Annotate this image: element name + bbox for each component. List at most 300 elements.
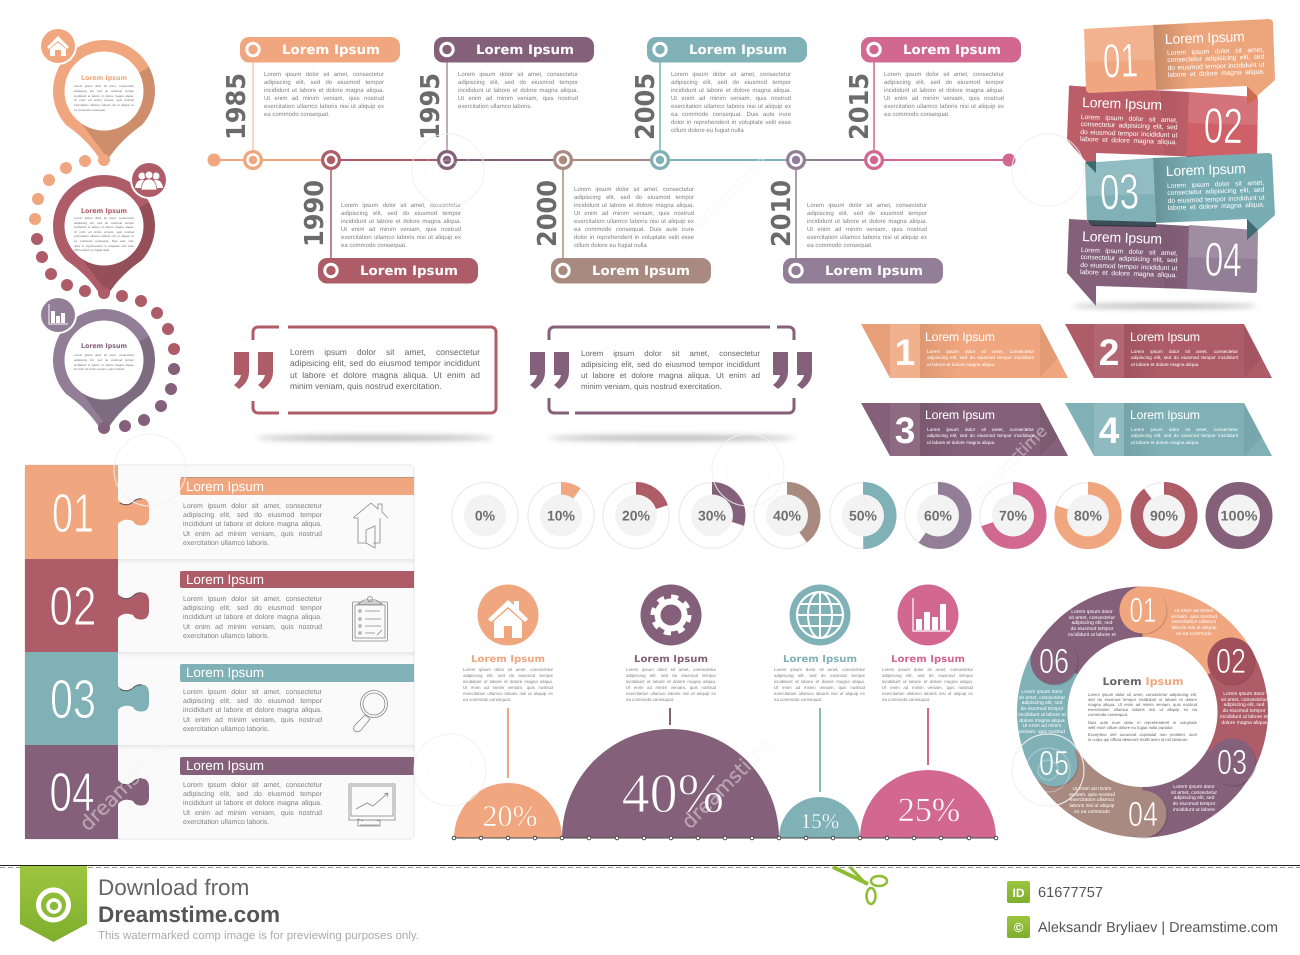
event 2010: incididunt ut labore et dolore magna aliqua. bbox=[807, 219, 927, 225]
event 2000: incididunt ut labore et dolore magna aliqua. bbox=[574, 203, 694, 209]
column 20%: Ut enim ad minim veniam, quis nostrud bbox=[463, 685, 553, 690]
banner 01: 01 bbox=[1102, 34, 1139, 89]
panel: location pins bbox=[29, 27, 180, 434]
chart: circular cycle bbox=[1017, 586, 1268, 838]
row 04: incididunt ut labore et dolore magna aliqua. bbox=[183, 800, 322, 807]
ribbon 4: 4 bbox=[1099, 410, 1120, 451]
banner 02: consectetur adipisicing elit, sed bbox=[1081, 121, 1178, 132]
icon: scissors bbox=[833, 867, 887, 904]
event 2015: incididunt ut labore et dolore magna aliqua. bbox=[884, 88, 1004, 94]
pin 1 orange bbox=[53, 40, 155, 159]
row 01 bbox=[25, 465, 414, 559]
pin 3 purple: Lorem Ipsum bbox=[81, 342, 127, 350]
banner 04: Lorem Ipsum bbox=[1082, 228, 1162, 247]
timeline nodes bbox=[208, 150, 1016, 170]
pin 1 orange: exercitation ullamco laboris nisi ut aliquip ex bbox=[74, 103, 134, 107]
row 02: Lorem Ipsum bbox=[186, 572, 264, 587]
center text: exercitation ullamco laboris nisi ut aliquip ex ea bbox=[1088, 707, 1197, 712]
column 20%: Lorem ipsum dolor sit amet, consectetur bbox=[463, 667, 553, 672]
banner 04: 04 bbox=[1204, 234, 1242, 287]
segment text 01: ex ea commodo bbox=[1176, 631, 1212, 637]
segment text 06: incididunt ut labore et bbox=[1068, 632, 1116, 638]
ribbon 3: Lorem ipsum dolor sit amet, consectetur bbox=[927, 427, 1034, 432]
column 15%: adipiscing elit, sed do eiusmod tempor bbox=[774, 673, 865, 678]
event 1985: Lorem ipsum dolor sit amet, consectetur bbox=[264, 72, 384, 78]
donut 40%: 40% bbox=[773, 508, 802, 524]
pin 2 rose: exercitation ullamco laboris nisi ut aliquip ex bbox=[74, 234, 134, 238]
icon: quote marks bbox=[234, 352, 273, 389]
pin 2 rose: adipiscing elit, sed do eiusmod tempor bbox=[74, 221, 134, 225]
segment text 06: sit amet, consectetur bbox=[1069, 615, 1115, 621]
event 2005: incididunt ut labore et dolore magna aliqua. bbox=[671, 88, 791, 94]
event 2005: adipiscing elit, sed do eiusmod tempor bbox=[671, 80, 791, 86]
banner 02 bbox=[1067, 86, 1258, 173]
center text: in culpa qui officia deserunt mollit anim id est laborum. bbox=[1088, 737, 1188, 742]
donut 0% bbox=[452, 482, 518, 548]
panel: folded banners bbox=[1067, 19, 1275, 308]
banner 04: labore et dolore magna aliqua. bbox=[1080, 269, 1177, 279]
event 2000: Lorem Ipsum bbox=[592, 264, 690, 279]
panel: quote box 2 bbox=[530, 327, 812, 440]
event 1985: adipiscing elit, sed do eiusmod tempor bbox=[264, 80, 384, 86]
segment text 03 bbox=[1170, 785, 1218, 817]
watermark spirals bbox=[114, 134, 1084, 806]
event 2015: Lorem ipsum dolor sit amet, consectetur bbox=[884, 72, 1004, 78]
row 02: incididunt ut labore et dolore magna aliqua. bbox=[183, 614, 322, 621]
segment text 05: sit amet, consectetur bbox=[1019, 695, 1065, 701]
column 15%: incididunt ut labore et dolore magna aliqua. bbox=[774, 679, 865, 684]
watermark text: dreamstime bbox=[677, 732, 778, 834]
icon: people badge bbox=[130, 161, 168, 199]
donut 100%: 100% bbox=[1220, 508, 1258, 524]
event 2015: 2015 bbox=[845, 73, 875, 140]
ribbon 2: 2 bbox=[1099, 332, 1119, 373]
event 2005: dolor in reprehenderit in voluptate velit esse bbox=[671, 120, 791, 126]
column 40% bbox=[562, 584, 779, 838]
segment text 05: adipiscing elit, sed bbox=[1022, 700, 1062, 706]
quote text: Lorem ipsum dolor sit amet, consectetur bbox=[581, 349, 760, 358]
event 2005: 2005 bbox=[631, 73, 661, 140]
row 01: adipiscing elit, sed do eiusmod tempor bbox=[183, 512, 322, 519]
row 01: 01 bbox=[52, 482, 94, 544]
banner 01: labore et dolore magna aliqua. bbox=[1168, 68, 1265, 79]
ribbon 1: 1 bbox=[895, 332, 915, 373]
event 2005: Ut enim ad minim veniam, quis nostrud bbox=[671, 96, 791, 102]
banner 01 bbox=[1084, 19, 1275, 105]
banner 02: do eiusmod tempor incididunt ut bbox=[1080, 129, 1177, 139]
column 20%: ea commodo consequat. bbox=[463, 697, 511, 702]
pin 2 rose: incididunt ut labore et dolore magna aliqua. bbox=[74, 225, 134, 229]
panel: quote box 1 bbox=[234, 327, 496, 440]
event 1990: Lorem Ipsum bbox=[360, 264, 458, 279]
banner 03: labore et dolore magna aliqua. bbox=[1168, 201, 1265, 212]
segment text 05: veniam, quis nostrud bbox=[1019, 729, 1065, 735]
ribbon 2: Lorem Ipsum bbox=[1130, 330, 1200, 344]
event 2000: adipiscing elit, sed do eiusmod tempor bbox=[574, 195, 694, 201]
row 01: Lorem ipsum dolor sit amet, consectetur bbox=[183, 503, 322, 510]
center text: sed do eiusmod tempor incididunt ut labore et dolore bbox=[1088, 697, 1197, 702]
author credit bbox=[1007, 916, 1278, 938]
segment text 04: ex ea commodo bbox=[1074, 809, 1110, 815]
ribbon 2: adipiscing elit, sed do eiusmod tempor incididunt bbox=[1131, 355, 1238, 360]
node 01 bbox=[1120, 586, 1168, 634]
column 15%: Lorem ipsum dolor sit amet, consectetur bbox=[774, 667, 865, 672]
banner 03: do eiusmod tempor incididunt ut bbox=[1168, 194, 1265, 205]
ribbon 3 bbox=[861, 403, 1068, 456]
row 03: 03 bbox=[50, 668, 96, 730]
column 40%: Lorem Ipsum bbox=[634, 654, 708, 665]
event 1995: adipiscing elit, sed do eiusmod tempor bbox=[458, 80, 578, 86]
row 04 bbox=[25, 745, 414, 839]
event 2005: exercitation ullamco laboris nisi ut aliquip ex bbox=[671, 104, 791, 110]
icon: house bbox=[488, 600, 528, 638]
ribbon 1: ut labore et dolore magna aliqua. bbox=[927, 362, 996, 367]
icon: gear bbox=[653, 597, 689, 633]
pin 2 rose: cillum dolore eu fugiat nulla bbox=[74, 248, 109, 252]
row 03: Ut enim ad minim veniam, quis nostrud bbox=[183, 717, 322, 724]
segment 01 bbox=[1142, 586, 1251, 674]
ribbon 4: adipiscing elit, sed do eiusmod tempor incididunt bbox=[1131, 433, 1238, 438]
node 06: 06 bbox=[1039, 642, 1069, 681]
column 25%: Ut enim ad minim veniam, quis nostrud bbox=[882, 685, 973, 690]
ribbon 4: ut labore et dolore magna aliqua. bbox=[1131, 440, 1200, 445]
icon: magnifier outline bbox=[354, 690, 388, 732]
column 20% bbox=[454, 584, 562, 838]
event 2005: ea commodo consequat. Duis aute irure bbox=[671, 112, 791, 118]
event 2010 bbox=[767, 180, 943, 284]
pin 3 purple: Lorem ipsum dolor sit amet, consectetur bbox=[74, 353, 134, 357]
donut 70% bbox=[980, 482, 1046, 548]
event 2000: Ut enim ad minim veniam, quis nostrud bbox=[574, 211, 694, 217]
column 20%: 20% bbox=[482, 800, 538, 833]
donut 20% bbox=[603, 482, 669, 548]
ribbon 1: Lorem Ipsum bbox=[925, 330, 995, 344]
pin 3 purple bbox=[53, 309, 155, 428]
event 1995: Lorem ipsum dolor sit amet, consectetur bbox=[458, 72, 578, 78]
author credit: © bbox=[1014, 920, 1024, 935]
panel: puzzle list bbox=[25, 465, 414, 839]
event 2010: ea commodo consequat. bbox=[807, 243, 873, 249]
quote text: minim veniam, quis nostrud exercitation. bbox=[581, 382, 722, 391]
event 1995: exercitation ullamco laboris. bbox=[458, 104, 532, 110]
ribbon 2 bbox=[1065, 324, 1272, 378]
event 2010: Lorem Ipsum bbox=[825, 264, 923, 279]
icon: house badge bbox=[39, 27, 77, 65]
row 04: adipiscing elit, sed do eiusmod tempor bbox=[183, 791, 322, 798]
banner 02: 02 bbox=[1203, 98, 1243, 154]
segment text 01: veniam, quis nostrud bbox=[1171, 614, 1217, 620]
banner 02: Lorem ipsum dolor sit amet, bbox=[1081, 114, 1178, 124]
donut 80% bbox=[1055, 482, 1121, 548]
donut 90% bbox=[1131, 482, 1197, 548]
dreamstime ribbon bbox=[20, 866, 87, 942]
download text bbox=[98, 875, 419, 942]
segment 02 bbox=[1208, 649, 1268, 775]
donut 50% bbox=[830, 482, 896, 548]
download text: Dreamstime.com bbox=[98, 902, 280, 927]
segment text 05 bbox=[1018, 690, 1066, 736]
event 1990: Ut enim ad minim veniam, quis nostrud bbox=[341, 227, 461, 233]
quote text bbox=[581, 348, 760, 396]
center title: Lorem Ipsum bbox=[1102, 676, 1184, 688]
segment text 04: veniam, quis nostrud bbox=[1069, 792, 1115, 798]
node 05 bbox=[1030, 740, 1078, 788]
image id: ID bbox=[1012, 886, 1025, 900]
center text: magna aliqua. Ut enim ad minim veniam, quis nostrud bbox=[1088, 702, 1197, 707]
column 40%: Ut enim ad minim veniam, quis nostrud bbox=[626, 685, 716, 690]
banner 04: do eiusmod tempor incididunt ut bbox=[1080, 262, 1177, 272]
quote text: adipisicing elit, sed do eiusmod tempor incididunt bbox=[290, 358, 480, 368]
row 01: Lorem Ipsum bbox=[186, 479, 264, 494]
event 2000: ea commodo consequat. Duis aute irure bbox=[574, 227, 694, 233]
banner 01: consectetur adipisicing elit, sed bbox=[1167, 54, 1264, 64]
row 01: Ut enim ad minim veniam, quis nostrud bbox=[183, 531, 322, 538]
segment text 03: sit amet, consectetur bbox=[1171, 790, 1217, 796]
image id: 61677757 bbox=[1038, 885, 1103, 901]
quote text: ut labore et dolore magna aliqua. Ut enim ad bbox=[290, 370, 480, 380]
column 20%: exercitation ullamco laboris nisi ut aliquip ex bbox=[463, 691, 553, 696]
event 1990: adipiscing elit, sed do eiusmod tempor bbox=[341, 211, 461, 217]
watermark text: dreamstime bbox=[969, 421, 1051, 503]
column 25%: 25% bbox=[898, 792, 960, 829]
segment text 01: exercitation ullamco bbox=[1172, 619, 1216, 625]
event 1990: Lorem ipsum dolor sit amet, consectetur bbox=[341, 203, 461, 209]
center text: commodo consequat. bbox=[1088, 712, 1128, 717]
column 40%: exercitation ullamco laboris nisi ut aliquip ex bbox=[626, 691, 716, 696]
icon: chart badge bbox=[39, 296, 77, 334]
segment text 06: adipiscing elit, sed bbox=[1072, 620, 1112, 626]
column 25%: Lorem ipsum dolor sit amet, consectetur bbox=[882, 667, 973, 672]
chart: semicircle percentages bbox=[452, 584, 998, 840]
row 04: exercitation ullamco laboris. bbox=[183, 819, 269, 826]
footer bbox=[0, 866, 1300, 942]
panel: numbered ribbons bbox=[861, 324, 1272, 456]
banner 01: Lorem Ipsum bbox=[1165, 28, 1245, 47]
event 1985: Lorem Ipsum bbox=[282, 43, 380, 58]
donut 60% bbox=[905, 482, 971, 548]
column 15%: Lorem Ipsum bbox=[783, 654, 857, 665]
row 01: incididunt ut labore et dolore magna aliqua. bbox=[183, 521, 322, 528]
row 02: exercitation ullamco laboris. bbox=[183, 633, 269, 640]
center text: Excepteur sint occaecat cupidatat non proident, sunt bbox=[1088, 732, 1197, 737]
segment text 02: adipiscing elit, sed bbox=[1224, 702, 1264, 708]
donut 90%: 90% bbox=[1150, 508, 1179, 524]
node 02 bbox=[1208, 638, 1256, 686]
banner 03 bbox=[1085, 153, 1275, 240]
donut 70%: 70% bbox=[999, 508, 1028, 524]
event 2015: ea commodo consequat. bbox=[884, 112, 950, 118]
event 1995: 1995 bbox=[416, 73, 446, 140]
banner 02: labore et dolore magna aliqua. bbox=[1080, 136, 1177, 146]
segment text 05: do eiusmod tempor bbox=[1021, 706, 1063, 712]
quote text: Lorem ipsum dolor sit amet, consectetur bbox=[290, 347, 480, 357]
column 25%: Lorem Ipsum bbox=[891, 654, 965, 665]
pin 1 orange: Ut enim ad minim veniam, quis nostrud bbox=[74, 98, 134, 102]
download text: This watermarked comp image is for previewing purposes only. bbox=[98, 930, 419, 942]
segment text 06: do eiusmod tempor bbox=[1071, 626, 1113, 632]
event 1990: incididunt ut labore et dolore magna aliqua. bbox=[341, 219, 461, 225]
donut 40% bbox=[754, 482, 820, 548]
segment 03 bbox=[1142, 750, 1251, 838]
row 03: Lorem Ipsum bbox=[186, 665, 264, 680]
ribbon 2: ut labore et dolore magna aliqua. bbox=[1131, 362, 1200, 367]
banner 02: Lorem Ipsum bbox=[1082, 94, 1162, 113]
icon: monitor outline bbox=[349, 784, 395, 826]
axis with ticks bbox=[452, 836, 998, 840]
quote text: minim veniam, quis nostrud exercitation. bbox=[290, 381, 442, 391]
event 2005: Lorem ipsum dolor sit amet, consectetur bbox=[671, 72, 791, 78]
node 04: 04 bbox=[1128, 795, 1158, 834]
column 40%: 40% bbox=[622, 763, 724, 825]
segment text 03: adipiscing elit, sed bbox=[1174, 795, 1214, 801]
row 03: incididunt ut labore et dolore magna aliqua. bbox=[183, 707, 322, 714]
pin 2 rose: Lorem Ipsum bbox=[81, 207, 127, 215]
pin 2 rose bbox=[53, 175, 155, 294]
event 1990: ea commodo consequat. bbox=[341, 243, 407, 249]
row 03: adipiscing elit, sed do eiusmod tempor bbox=[183, 698, 322, 705]
event 1985: incididunt ut labore et dolore magna aliqua. bbox=[264, 88, 384, 94]
column 15%: ea commodo consequat. bbox=[774, 697, 822, 702]
node 05: 05 bbox=[1039, 744, 1069, 783]
segment text 04 bbox=[1068, 787, 1116, 819]
author credit: Aleksandr Bryliaev | Dreamstime.com bbox=[1038, 920, 1278, 936]
banner 03: consectetur adipisicing elit, sed bbox=[1167, 187, 1264, 197]
node 04 bbox=[1120, 790, 1168, 838]
ribbon 4: Lorem ipsum dolor sit amet, consectetur bbox=[1131, 427, 1238, 432]
segment 05 bbox=[1017, 649, 1078, 775]
banner 01: Lorem ipsum dolor sit amet, bbox=[1167, 47, 1264, 57]
event 2010: adipiscing elit, sed do eiusmod tempor bbox=[807, 211, 927, 217]
row 04: Lorem ipsum dolor sit amet, consectetur bbox=[183, 782, 322, 789]
icon: clipboard outline bbox=[352, 596, 388, 641]
event 1995: Lorem Ipsum bbox=[476, 43, 574, 58]
column 15%: Ut enim ad minim veniam, quis nostrud bbox=[774, 685, 865, 690]
center text: Duis aute irure dolor in reprehenderit in voluptate bbox=[1088, 720, 1197, 724]
pin 1 orange: incididunt ut labore et dolore magna aliqua. bbox=[74, 94, 134, 98]
icon: globe bbox=[797, 592, 843, 638]
donut 80%: 80% bbox=[1074, 508, 1103, 524]
row 02: Lorem ipsum dolor sit amet, consectetur bbox=[183, 596, 322, 603]
segment text 01: laboris nisi ut aliquip bbox=[1171, 625, 1217, 631]
donut 0%: 0% bbox=[475, 508, 496, 524]
download text: Download from bbox=[98, 875, 249, 900]
event 1985: exercitation ullamco laboris nisi ut aliquip ex bbox=[264, 104, 384, 110]
pin 3 purple: incididunt ut labore et dolore magna aliqua. bbox=[74, 363, 134, 367]
quote text: ut labore et dolore magna aliqua. Ut enim ad bbox=[581, 371, 760, 380]
event 2000: Lorem ipsum dolor sit amet, consectetur bbox=[574, 187, 694, 193]
cut line bbox=[0, 866, 1300, 868]
event 1985: ea commodo consequat. bbox=[264, 112, 330, 118]
column 20%: adipiscing elit, sed do eiusmod tempor bbox=[463, 673, 553, 678]
ribbon 2: Lorem ipsum dolor sit amet, consectetur bbox=[1131, 349, 1238, 354]
event 1985: 1985 bbox=[222, 73, 252, 140]
event 1995 bbox=[416, 37, 594, 140]
event 2010: exercitation ullamco laboris nisi ut aliquip ex bbox=[807, 235, 927, 241]
segment text 02 bbox=[1220, 692, 1268, 730]
column 25%: incididunt ut labore et dolore magna aliqua. bbox=[882, 679, 973, 684]
segment text 04: exercitation ullamco bbox=[1070, 797, 1114, 803]
segment text 04: laboris nisi ut aliquip bbox=[1069, 803, 1115, 809]
row 01: exercitation ullamco laboris. bbox=[183, 540, 269, 547]
event 2015 bbox=[845, 37, 1021, 140]
column 15% bbox=[774, 584, 865, 838]
donut 30% bbox=[679, 482, 745, 548]
icon: bar chart bbox=[913, 598, 950, 631]
row 02: 02 bbox=[50, 575, 96, 637]
row 03: exercitation ullamco laboris. bbox=[183, 726, 269, 733]
dotted path bbox=[29, 154, 180, 434]
pin 1 orange: Lorem Ipsum bbox=[81, 74, 127, 82]
segment text 02: dolore magna aliqua bbox=[1221, 720, 1267, 726]
column 40%: incididunt ut labore et dolore magna aliqua. bbox=[626, 679, 716, 684]
pin 2 rose: Lorem ipsum dolor sit amet, consectetur bbox=[74, 216, 134, 220]
event 1985: Ut enim ad minim veniam, quis nostrud bbox=[264, 96, 384, 102]
segment text 03: do eiusmod tempor bbox=[1173, 801, 1215, 807]
event 1985 bbox=[222, 37, 400, 140]
segment text 06 bbox=[1068, 610, 1116, 642]
event 2010: Ut enim ad minim veniam, quis nostrud bbox=[807, 227, 927, 233]
ribbon 4 bbox=[1065, 403, 1272, 456]
row 04: Ut enim ad minim veniam, quis nostrud bbox=[183, 810, 322, 817]
icon: quote marks right bbox=[773, 352, 812, 389]
column 20%: incididunt ut labore et dolore magna aliqua. bbox=[463, 679, 553, 684]
segment text 02: do eiusmod tempor bbox=[1223, 708, 1265, 714]
segment text 02: incididunt ut labore et bbox=[1220, 714, 1268, 720]
event 2000: 2000 bbox=[533, 180, 563, 247]
row 03 bbox=[25, 652, 414, 745]
column 40%: adipiscing elit, sed do eiusmod tempor bbox=[626, 673, 716, 678]
banner 03: 03 bbox=[1099, 163, 1140, 221]
watermark text: dreamstime bbox=[75, 734, 176, 836]
donut 30%: 30% bbox=[698, 508, 727, 524]
column 25%: exercitation ullamco laboris nisi ut aliquip ex bbox=[882, 691, 973, 696]
ribbon 4: Lorem Ipsum bbox=[1130, 408, 1200, 422]
segment text 01 bbox=[1170, 609, 1218, 641]
event 2015: exercitation ullamco laboris nisi ut aliquip ex bbox=[884, 104, 1004, 110]
row 02: Ut enim ad minim veniam, quis nostrud bbox=[183, 624, 322, 631]
node 03 bbox=[1208, 738, 1256, 786]
watermark text: dreamstime bbox=[689, 151, 771, 233]
donut 60%: 60% bbox=[924, 508, 953, 524]
event 2015: Lorem Ipsum bbox=[903, 43, 1001, 58]
center text: velit esse cillum dolore eu fugiat nulla pariatur. bbox=[1088, 724, 1174, 730]
pin 3 purple: adipiscing elit, sed do eiusmod tempor bbox=[74, 358, 134, 362]
event 2015: Ut enim ad minim veniam, quis nostrud bbox=[884, 96, 1004, 102]
event 2000: exercitation ullamco laboris nisi ut aliquip ex bbox=[574, 219, 694, 225]
row 02: adipiscing elit, sed do eiusmod tempor bbox=[183, 605, 322, 612]
banner shadow bbox=[1073, 304, 1257, 308]
event 1995: Ut enim ad minim veniam, quis nostrud bbox=[458, 96, 578, 102]
node 02: 02 bbox=[1216, 642, 1246, 681]
center text bbox=[1088, 692, 1197, 750]
ribbon 3: ut labore et dolore magna aliqua. bbox=[927, 440, 996, 445]
row 04: Lorem Ipsum bbox=[186, 758, 264, 773]
event 1990: exercitation ullamco laboris nisi ut aliquip ex bbox=[341, 235, 461, 241]
event 2000 bbox=[533, 180, 711, 284]
event 2005: Lorem Ipsum bbox=[689, 43, 787, 58]
chart: percent donuts bbox=[452, 482, 1266, 548]
donut 100% bbox=[1212, 488, 1266, 542]
event 2000: cillum dolore eu fugiat nulla bbox=[574, 243, 647, 249]
segment text 05: Ut enim ad minim bbox=[1023, 723, 1061, 729]
segment text 05: dolore magna aliqua bbox=[1019, 718, 1065, 724]
chart: timeline bbox=[208, 37, 1021, 284]
row 04: 04 bbox=[50, 761, 94, 823]
image id bbox=[1007, 881, 1103, 903]
column 25%: adipiscing elit, sed do eiusmod tempor bbox=[882, 673, 973, 678]
event 2010: Lorem ipsum dolor sit amet, consectetur bbox=[807, 203, 927, 209]
segment 04 bbox=[1034, 750, 1142, 838]
